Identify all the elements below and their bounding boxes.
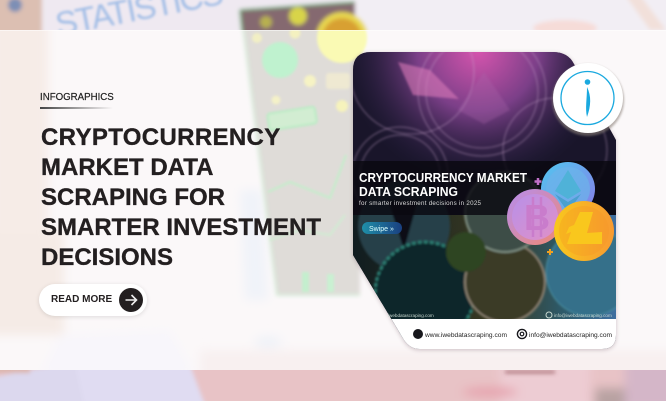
cover watermark contacts xyxy=(388,312,612,318)
icon: ethereum coin xyxy=(541,162,595,216)
category label: INFOGRAPHICS xyxy=(40,92,114,103)
title: CRYPTOCURRENCY xyxy=(41,124,281,150)
cover watermark contacts: info@iwebdatascraping.com xyxy=(554,313,612,318)
website contact xyxy=(413,329,508,339)
title: DECISIONS xyxy=(41,244,173,271)
panel: report cover card xyxy=(351,51,626,352)
swipe button: Swipe » xyxy=(369,226,394,233)
cover subtitle: for smarter investment decisions in 2025 xyxy=(359,200,482,207)
email contact xyxy=(517,329,612,339)
swipe button xyxy=(362,222,402,234)
title: MARKET DATA xyxy=(41,154,213,181)
icon: arrow xyxy=(119,288,143,312)
icon: bitcoin coin xyxy=(507,178,563,255)
icon: litecoin coin xyxy=(554,201,614,261)
cover watermark contacts: iwebdatascraping.com xyxy=(388,313,434,318)
cover title: DATA SCRAPING xyxy=(359,185,458,199)
cover title xyxy=(359,171,527,199)
bottom strip xyxy=(0,370,666,401)
read more button xyxy=(39,284,147,316)
icon: logo badge xyxy=(552,63,624,136)
title: SMARTER INVESTMENT xyxy=(41,214,321,241)
email contact: info@iwebdatascraping.com xyxy=(529,332,612,339)
website contact: www.iwebdatascraping.com xyxy=(424,332,508,339)
icon: bitcoin coin: B xyxy=(524,197,550,238)
cover title: CRYPTOCURRENCY MARKET xyxy=(359,171,527,185)
title: SCRAPING FOR xyxy=(41,184,225,211)
title xyxy=(41,124,321,271)
top strip xyxy=(0,0,666,30)
read more button: READ MORE xyxy=(51,294,112,305)
